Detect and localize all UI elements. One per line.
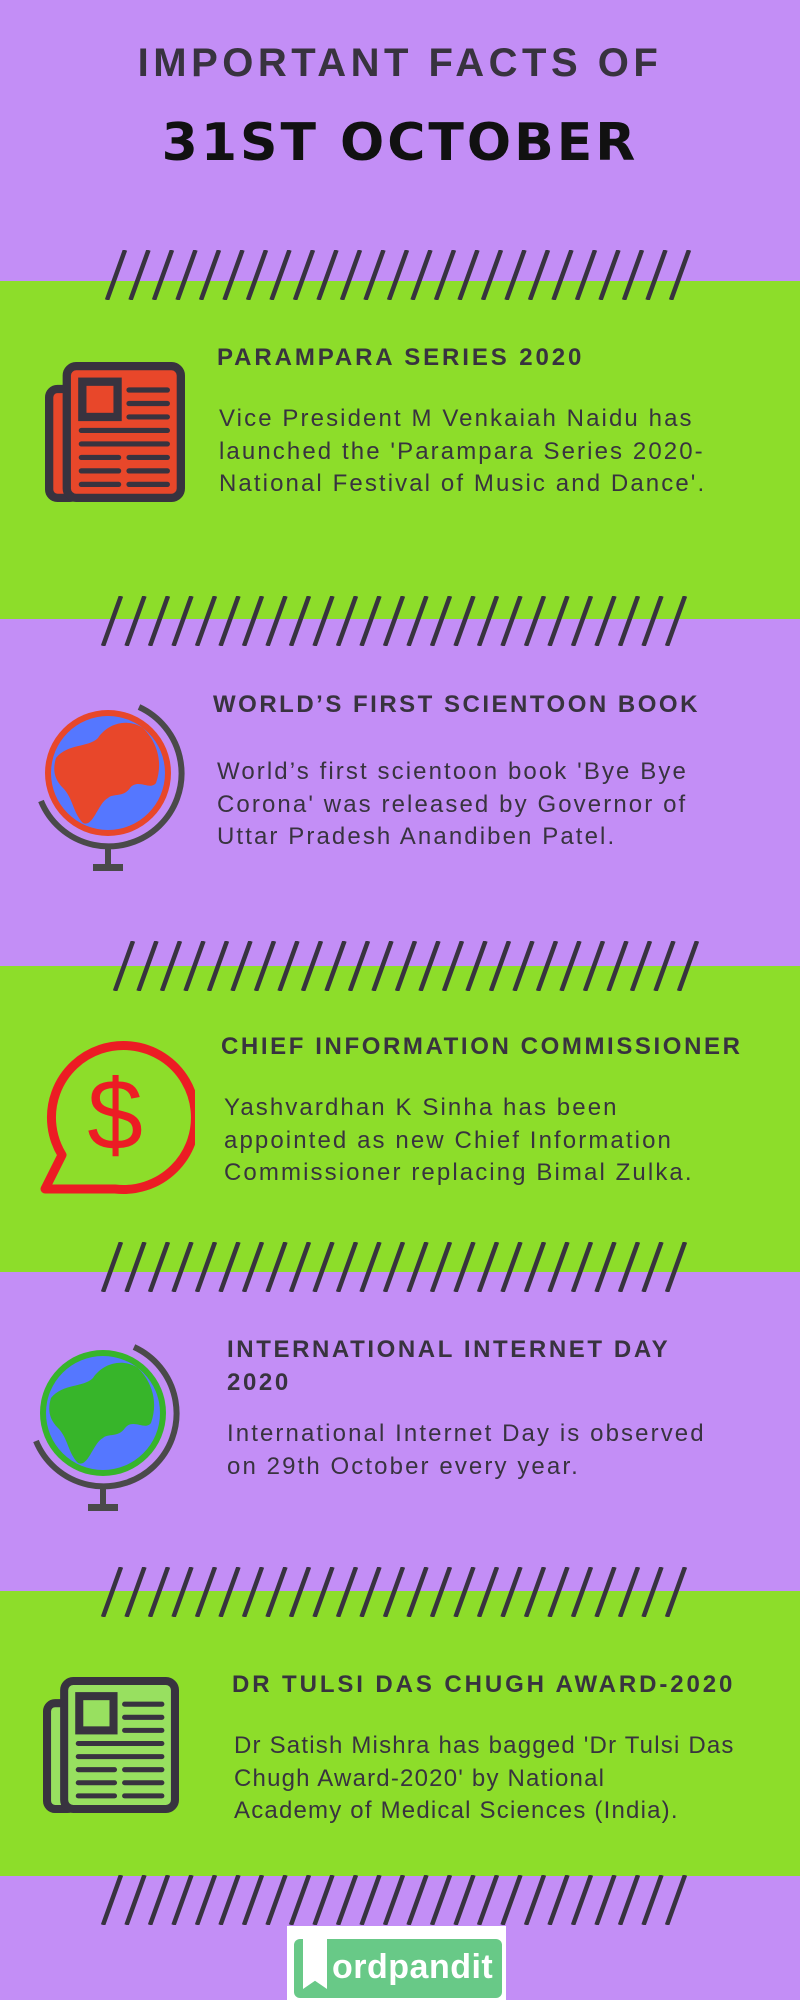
heading: internet day: 2020 (227, 1369, 291, 1396)
icon: globe green (33, 1344, 180, 1511)
heading: commissioner: CHIEF INFORMATION COMMISSIONER (221, 1033, 743, 1060)
text: scientoon: Uttar Pradesh Anandiben Patel. (217, 823, 616, 850)
title line 2: 31ST OCTOBER (162, 113, 638, 173)
heading: internet day (227, 1336, 670, 1396)
text: parampara: Vice President M Venkaiah Naidu has (219, 405, 694, 432)
text: tulsi das award (234, 1732, 735, 1824)
logo: wordpandit (287, 1926, 506, 2000)
icon: newspaper green (43, 1677, 179, 1813)
icon: dollar speech bubble (40, 1041, 195, 1194)
icon: globe red (38, 704, 185, 871)
text: commissioner: appointed as new Chief Information (224, 1126, 673, 1154)
text: tulsi das award: Dr Satish Mishra has bagged 'Dr Tulsi Das (234, 1732, 735, 1759)
title (138, 41, 662, 173)
heading: tulsi das award: DR TULSI DAS CHUGH AWARD-2020 (232, 1671, 735, 1698)
text: tulsi das award: Chugh Award-2020' by National (234, 1764, 605, 1792)
text: parampara (219, 405, 706, 497)
text: scientoon: Corona' was released by Governor of (217, 790, 687, 818)
text: parampara: National Festival of Music and Dance'. (219, 470, 706, 497)
text: internet day: International Internet Day is observed (227, 1420, 706, 1447)
title line 1: IMPORTANT FACTS OF (138, 41, 662, 85)
icon: newspaper red (45, 362, 185, 502)
icon: dollar speech bubble: $ (87, 1059, 143, 1171)
text: internet day (227, 1420, 706, 1480)
text: internet day: on 29th October every year. (227, 1452, 580, 1480)
text: tulsi das award: Academy of Medical Sciences (India). (234, 1797, 679, 1824)
text: scientoon: World’s first scientoon book 'Bye Bye (217, 758, 688, 785)
logo: wordpandit: ordpandit (332, 1948, 493, 1986)
text: commissioner (224, 1094, 694, 1186)
heading: parampara: PARAMPARA SERIES 2020 (217, 344, 584, 371)
text: commissioner: Commissioner replacing Bimal Zulka. (224, 1159, 694, 1186)
text: scientoon (217, 758, 688, 850)
heading: scientoon: WORLD’S FIRST SCIENTOON BOOK (213, 691, 700, 718)
text: parampara: launched the 'Parampara Series 2020- (219, 438, 705, 464)
text: commissioner: Yashvardhan K Sinha has been (224, 1094, 619, 1121)
heading: internet day: INTERNATIONAL INTERNET DAY (227, 1336, 670, 1363)
